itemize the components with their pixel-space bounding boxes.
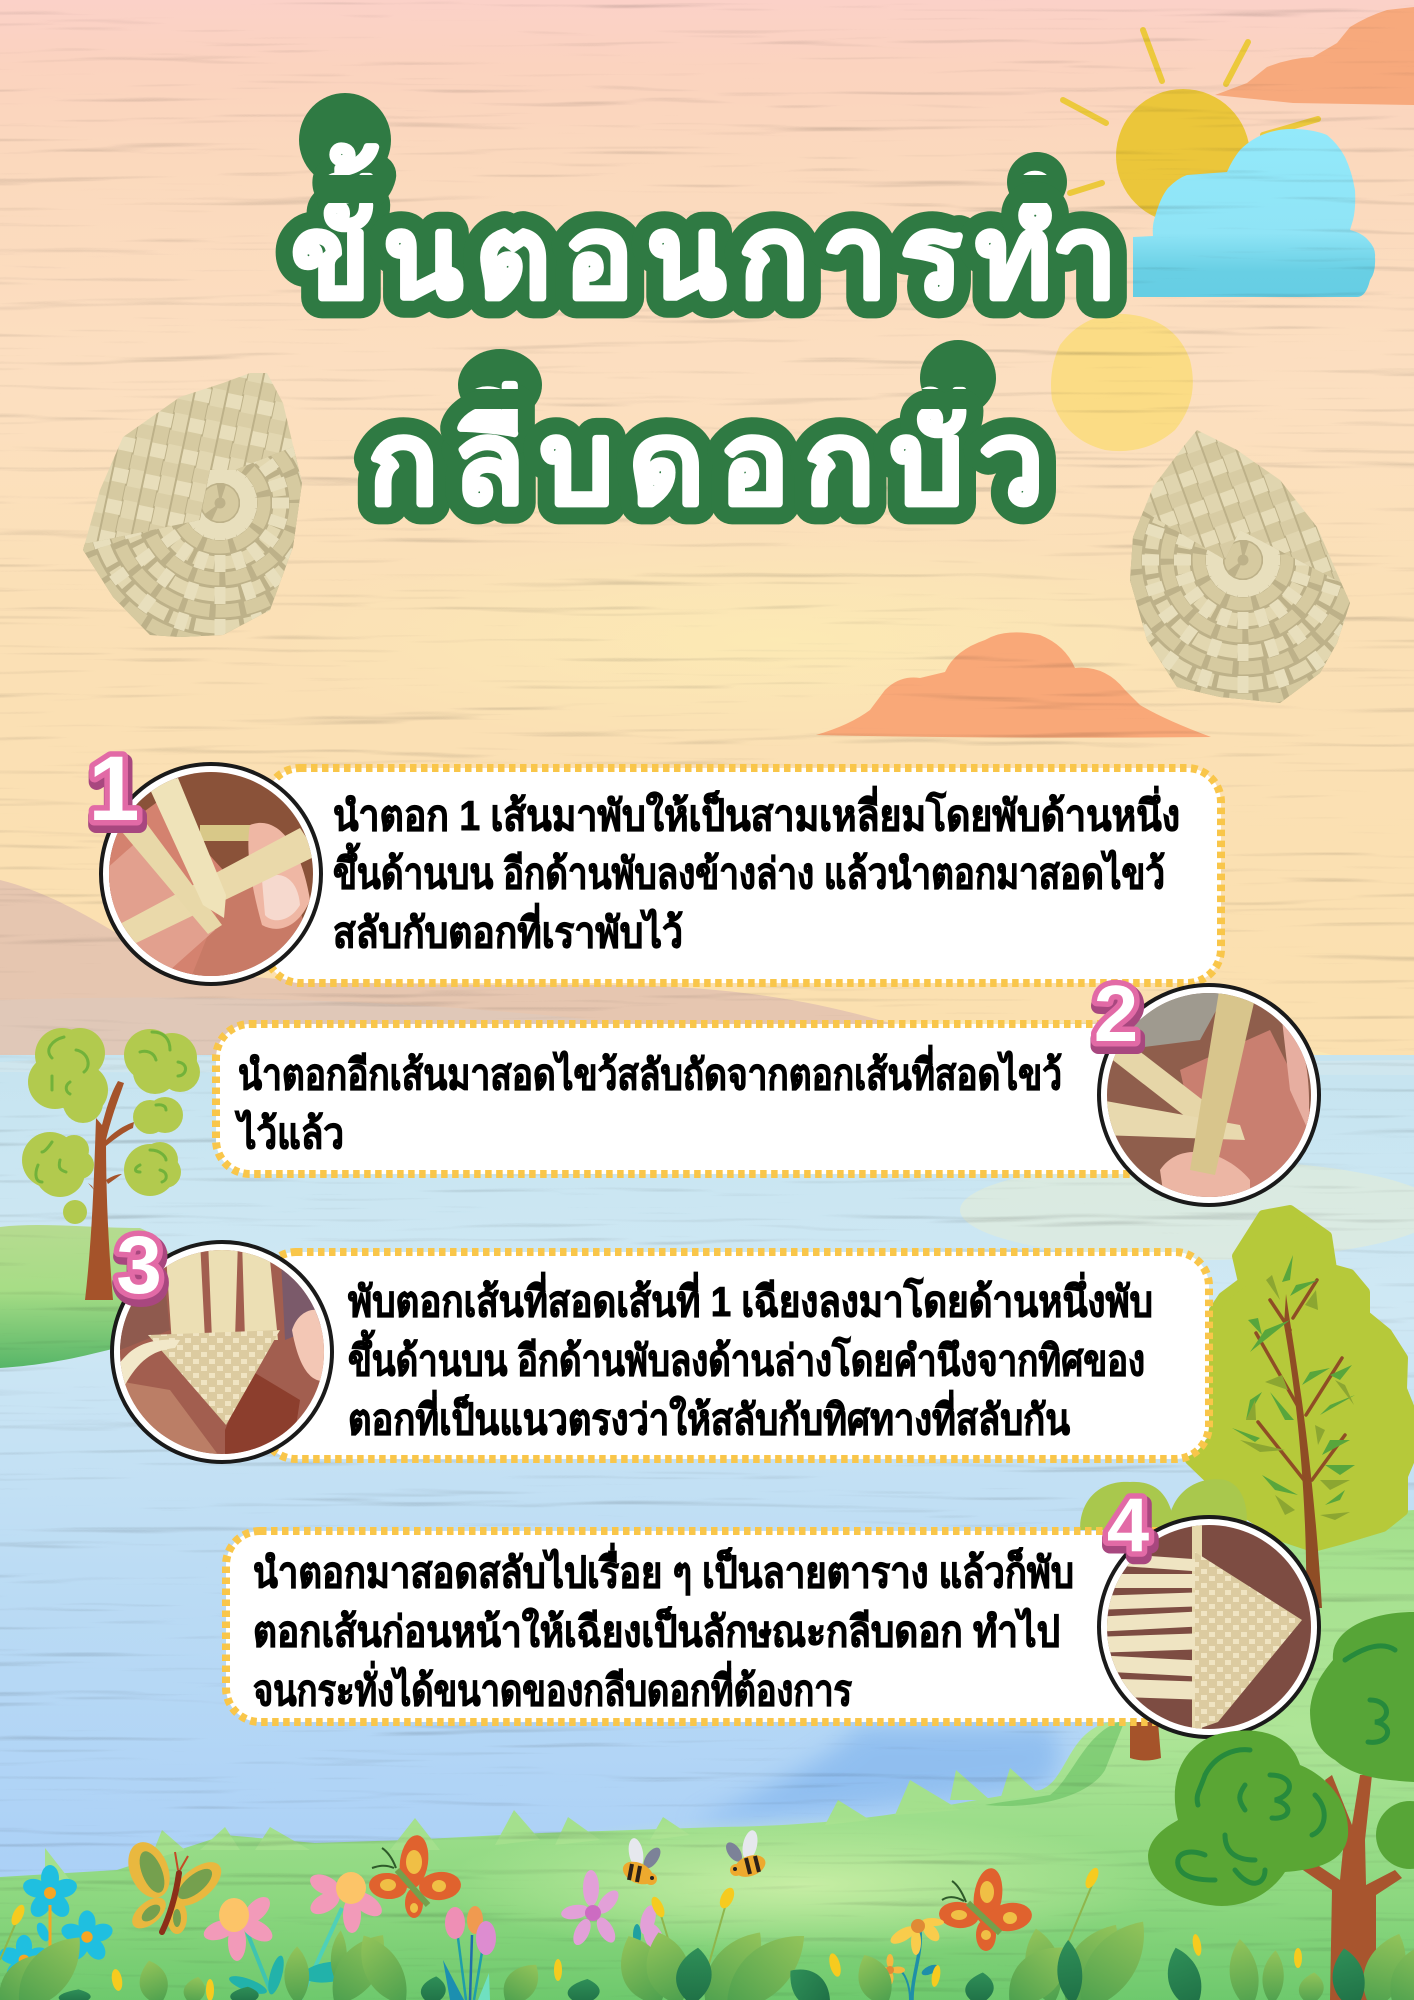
text: step 2 description: ไว้แล้ว [234, 1109, 344, 1157]
illustration: left tree [22, 1028, 200, 1300]
badge: number 2: 2 [1096, 974, 1140, 1063]
icon: yellow blob [1051, 314, 1193, 451]
decorations: sun, clouds and yellow blob [816, 7, 1414, 738]
illustration: butterfly yellow [121, 1836, 229, 1934]
badge: number 4: 4 [1109, 1488, 1151, 1573]
illustration: foreground leaves [0, 1907, 1414, 2000]
illustration: green foreground trees [1148, 1612, 1414, 2000]
blue flowers [0, 1865, 115, 1985]
text: step 2 description [234, 1045, 1062, 1157]
icon: orange cloud top right [1215, 7, 1414, 105]
purple flowers [560, 1870, 669, 1956]
title line 2 [368, 340, 1044, 528]
panel: step 1 [266, 768, 1221, 983]
text: step 4 description: นำตอกมาสอดสลับไปเรื่อย ๆ เป็นลายตาราง แล้วก็พับ [253, 1543, 1074, 1596]
text: step 1 description [333, 786, 1180, 956]
title line 2: กลีบดอกบัว [368, 398, 1044, 528]
icon: sun with rays [1063, 30, 1318, 223]
yellow flower [875, 1918, 944, 2000]
title [291, 93, 1117, 528]
badge: number 4: 4 [1107, 1483, 1149, 1568]
text: step 2 description: นำตอกอีกเส้นมาสอดไขว้สลับถัดจากตอกเส้นที่สอดไขว้ [238, 1045, 1062, 1098]
text: step 1 description: ขึ้นด้านบน อีกด้านพับลงข้างล่าง แล้วนำตอกมาสอดไขว้ [333, 842, 1165, 897]
badge: number 3: 3 [116, 1220, 162, 1311]
tulips [443, 1906, 496, 2000]
title line 1 [291, 93, 1117, 322]
illustration: flowers [0, 1865, 1302, 2000]
photo: step 4 finished weave [1099, 1517, 1320, 1738]
illustration: butterfly orange left [368, 1833, 462, 1918]
text: step 3 description [348, 1272, 1153, 1443]
text: step 4 description [253, 1543, 1074, 1714]
illustration: butterfly orange right [938, 1866, 1034, 1951]
badge: number 2: 2 [1094, 969, 1138, 1058]
illustration: big yellow-green tree and bushes [1080, 1210, 1414, 1760]
icon: bee right [723, 1829, 768, 1881]
panel: step 3 [262, 1252, 1209, 1459]
weave basket right [1130, 430, 1350, 703]
text: step 4 description: จนกระทั่งได้ขนาดของกลีบดอกที่ต้องการ [253, 1661, 852, 1714]
badge: number 1: 1 [90, 743, 142, 845]
text: step 3 description: ตอกที่เป็นแนวตรงว่าให้สลับกับทิศทางที่สลับกัน [348, 1390, 1070, 1443]
photo: step 3 woven tip [112, 1240, 335, 1465]
title line 1: ขั้นตอนการทำ [291, 172, 1117, 322]
badge: number 3: 3 [118, 1225, 164, 1316]
icon: blue cloud [1133, 129, 1375, 297]
yellow buds [0, 1866, 1302, 2000]
photo: step 2 crossed strips [1099, 985, 1320, 1205]
bushes [1080, 1482, 1175, 1530]
pink flowers [201, 1870, 386, 2000]
title line 1: ขั้นตอนการทำ [291, 144, 1117, 294]
panel: step 2 [216, 1024, 1196, 1174]
title line 1: ขั้นตอนการทำ [291, 172, 1117, 322]
text: step 1 description: สลับกับตอกที่เราพับไว้ [333, 903, 683, 956]
badge: number 1: 1 [88, 738, 140, 840]
title line 2: กลีบดอกบัว [368, 398, 1044, 528]
text: step 4 description: ตอกเส้นก่อนหน้าให้เฉียงเป็นลักษณะกลีบดอก ทำไป [253, 1606, 1060, 1655]
text: step 3 description: พับตอกเส้นที่สอดเส้นที่ 1 เฉียงลงมาโดยด้านหนึ่งพับ [348, 1272, 1153, 1325]
text: step 3 description: ขึ้นด้านบน อีกด้านพับลงด้านล่างโดยคำนึงจากทิศของ [348, 1329, 1145, 1384]
icon: orange cloud lower [816, 632, 1211, 738]
title line 2: กลีบดอกบัว [368, 378, 1044, 508]
text: step 1 description: นำตอก 1 เส้นมาพับให้เป็นสามเหลี่ยมโดยพับด้านหนึ่ง [333, 786, 1180, 839]
weave basket left [83, 373, 302, 637]
photo: step 1 folding bamboo strip [101, 764, 321, 984]
icon: bee left [619, 1837, 664, 1889]
panel: step 4 [226, 1531, 1206, 1722]
